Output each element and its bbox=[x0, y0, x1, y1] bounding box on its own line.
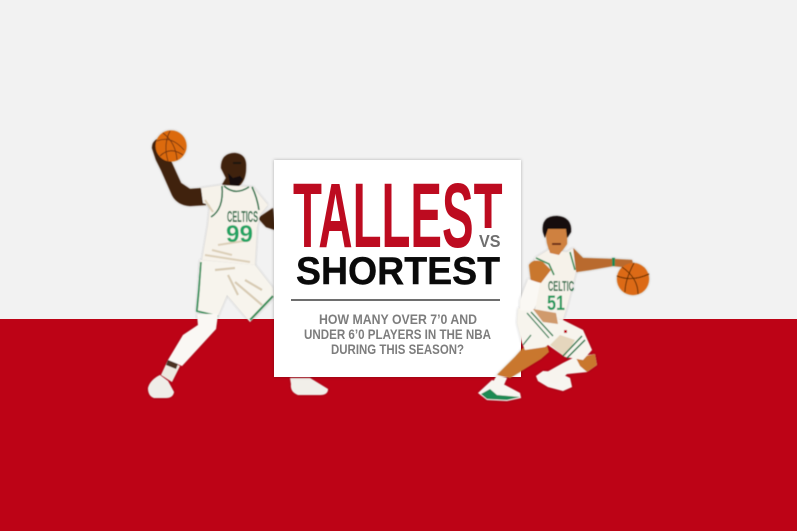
dribbling arm bbox=[573, 248, 634, 272]
basketball left bbox=[156, 130, 186, 162]
far arm bbox=[258, 208, 275, 230]
right shoe bbox=[290, 378, 328, 395]
player: tall player left bbox=[148, 130, 328, 398]
jersey number: 99 bbox=[226, 221, 253, 248]
head bbox=[221, 153, 246, 190]
background: lower red band bbox=[0, 319, 797, 531]
jersey bbox=[535, 248, 576, 320]
front shoe bbox=[478, 380, 521, 401]
back leg bbox=[547, 354, 597, 384]
title card bbox=[274, 160, 521, 377]
shorts bbox=[517, 308, 592, 360]
question text: DURING THIS SEASON? bbox=[331, 342, 464, 357]
question text bbox=[304, 312, 491, 357]
jersey number: 51 bbox=[547, 292, 565, 315]
head bbox=[543, 216, 571, 255]
heading: vs: VS bbox=[479, 231, 500, 251]
infographic canvas bbox=[0, 129, 797, 531]
question text: HOW MANY OVER 7’0 AND bbox=[319, 312, 477, 327]
basketball right bbox=[617, 263, 649, 295]
sock bbox=[161, 360, 180, 382]
front sock bbox=[493, 375, 507, 387]
question text: UNDER 6’0 PLAYERS IN THE NBA bbox=[304, 327, 491, 342]
heading: shortest: SHORTEST bbox=[296, 250, 500, 293]
player: short player right bbox=[478, 216, 649, 401]
player: short player right: CELTIC bbox=[548, 278, 574, 295]
left shoe bbox=[148, 375, 174, 398]
back shoe bbox=[536, 371, 572, 391]
near arm bbox=[520, 261, 558, 324]
shorts bbox=[197, 260, 274, 322]
player: tall player left: CELTICS bbox=[227, 209, 258, 226]
front leg bbox=[497, 345, 549, 378]
front leg bbox=[168, 314, 218, 366]
heading: tallest: TALLEST bbox=[293, 165, 502, 267]
jersey bbox=[201, 185, 268, 265]
raised arm bbox=[152, 139, 206, 206]
background: upper light band bbox=[0, 0, 797, 319]
